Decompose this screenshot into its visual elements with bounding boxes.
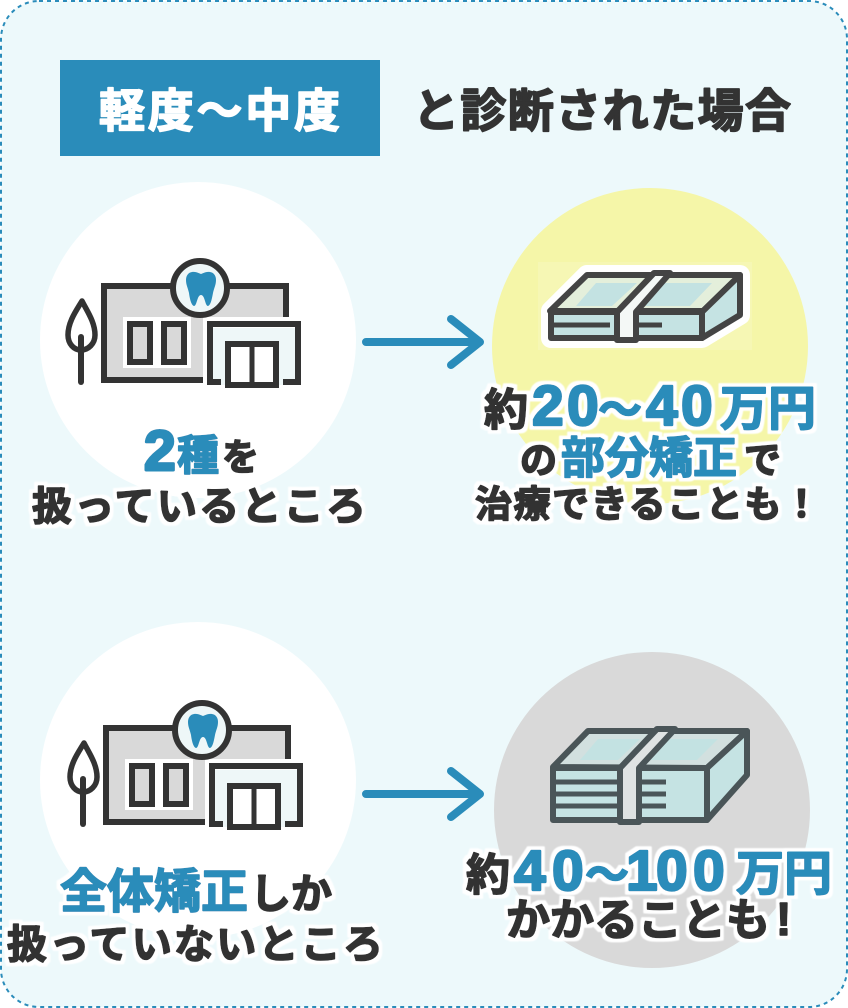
label: の部分矯正で: で [744,440,781,481]
panel: yellow circle [492,188,808,504]
price: 約40〜100万円: 約 [466,851,510,900]
label: 全体矯正しか: しか [250,871,332,917]
label: 2種を: を [222,437,259,478]
price: 約40〜100万円: 100 [626,839,725,903]
heading text: と診断された場合 [413,85,791,137]
price: 約40〜100万円: 〜 [585,851,629,900]
arrow: top [366,319,480,365]
label: 2種を: 2 [144,419,176,483]
heading badge: 軽度〜中度 [60,60,380,156]
price: 約20〜40万円: 万円 [720,383,816,436]
label: 2種を: 種 [177,432,219,479]
label: 治療できることも！: 治療できることも！ [475,484,820,525]
label: の部分矯正で: の [520,440,557,481]
price: 約20〜40万円: 〜 [598,386,642,435]
label: 扱っていないところ: 扱っていないところ [7,923,383,967]
icon: dental clinic building [68,261,305,389]
icon: dental clinic building [70,703,307,831]
price: 約20〜40万円: 約 [484,386,528,435]
heading badge: 軽度〜中度: 軽度〜中度 [99,85,340,137]
icon: thin stack of money [538,262,752,350]
arrow: bottom [366,771,480,817]
label: の部分矯正で: 部分矯正 [561,434,737,483]
price: 約40〜100万円: 40 [514,839,584,903]
panel: grey circle [494,652,810,968]
label: かかることも!: かかることも [506,896,770,945]
icon: thick stack of money [553,729,747,822]
label: 扱っているところ: 扱っているところ [32,485,366,529]
label: かかることも!: ! [776,893,791,945]
panel: top clinic circle [40,182,356,498]
panel: bottom clinic circle [40,622,356,938]
price: 約20〜40万円: 20 [532,374,599,438]
price: 約40〜100万円: 万円 [736,848,832,901]
label: 全体矯正しか: 全体矯正 [60,865,248,918]
price: 約20〜40万円: 40 [646,374,713,438]
